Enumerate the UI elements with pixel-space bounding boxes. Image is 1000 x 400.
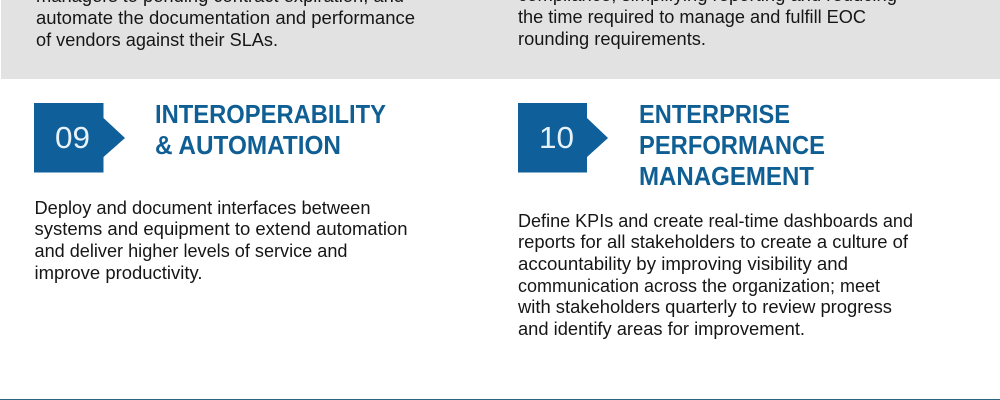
text block: enterprise performance description: accountability by improving visibility and	[518, 254, 848, 274]
heading: enterprise performance management	[639, 99, 825, 191]
text block: interoperability description	[34, 198, 408, 283]
heading: enterprise performance management: ENTERPRISE	[639, 99, 790, 129]
icon: number badge 10: 10	[539, 120, 574, 155]
text block: interoperability description: improve productivity.	[34, 263, 202, 283]
heading: interoperability and automation: & AUTOMATION	[155, 130, 341, 160]
text block: interoperability description: and deliver higher levels of service and	[34, 241, 348, 261]
text block: EOC compliance copy: rounding requirements.	[518, 29, 706, 49]
heading: interoperability and automation	[155, 99, 386, 160]
heading: enterprise performance management: MANAGEMENT	[639, 161, 814, 191]
icon: number badge 10	[518, 103, 608, 172]
text block: vendor management copy	[36, 0, 415, 50]
text block: interoperability description: Deploy and document interfaces between	[34, 198, 370, 218]
text block: enterprise performance description: with stakeholders quarterly to review progress	[517, 297, 892, 317]
text block: interoperability description: systems and equipment to extend automation	[34, 219, 408, 239]
icon: number badge 09: 09	[55, 120, 90, 155]
heading: enterprise performance management: PERFORMANCE	[639, 130, 825, 160]
heading: interoperability and automation: INTEROPERABILITY	[155, 99, 386, 129]
icon: number badge 09	[34, 103, 125, 172]
text block: EOC compliance copy: the time required to manage and fulfill EOC	[518, 7, 866, 27]
text block: enterprise performance description	[517, 211, 913, 339]
text block: enterprise performance description: communication across the organization; meet	[518, 276, 880, 296]
text block: enterprise performance description: and identify areas for improvement.	[518, 319, 805, 339]
text block: enterprise performance description: Define KPIs and create real-time dashboards and	[518, 211, 913, 231]
panel: grey band from previous section	[1, 0, 1000, 79]
text block: EOC compliance copy	[518, 0, 897, 49]
text block: enterprise performance description: reports for all stakeholders to create a culture of	[518, 232, 909, 252]
text block: vendor management copy: automate the documentation and performance	[36, 8, 415, 28]
text block: vendor management copy: of vendors against their SLAs.	[36, 30, 278, 50]
